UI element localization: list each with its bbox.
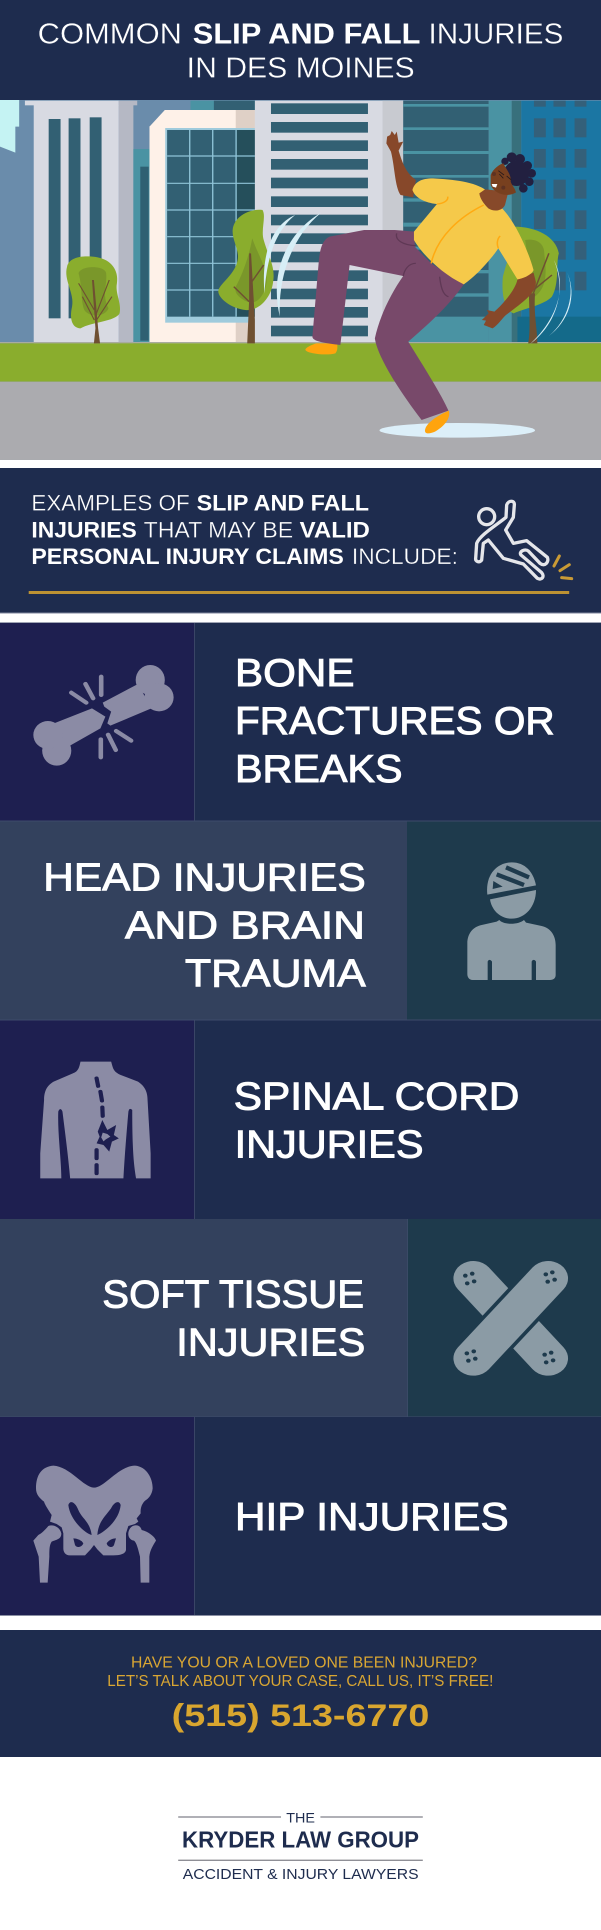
label: [43, 857, 366, 996]
intro text: THAT MAY BE: [144, 518, 293, 543]
label: SOFT TISSUE: [102, 1273, 364, 1316]
tree: right: [502, 227, 559, 343]
illustration: city street with man slipping: [0, 100, 601, 460]
label: BREAKS: [235, 748, 402, 791]
title: INJURIES: [428, 18, 563, 50]
icon: back with spine injury: [40, 1062, 151, 1178]
panel: soft tissue injuries: [0, 1219, 601, 1417]
logo: The Kryder Law Group: [178, 1810, 423, 1883]
label: HIP INJURIES: [235, 1496, 509, 1539]
logo: The Kryder Law Group: KRYDER LAW GROUP: [182, 1826, 419, 1852]
title: [38, 18, 563, 85]
intro text: INCLUDE:: [352, 544, 458, 569]
title: IN DES MOINES: [187, 53, 415, 85]
panel: bone fractures or breaks: [0, 623, 601, 821]
motion lines: [264, 213, 572, 344]
logo: The Kryder Law Group: ACCIDENT & INJURY LAWYERS: [183, 1867, 419, 1883]
intro text: [31, 491, 458, 569]
icon: pelvis: [33, 1466, 156, 1583]
label: TRAUMA: [185, 953, 366, 996]
label: BONE: [235, 652, 354, 695]
label: INJURIES: [235, 1123, 424, 1166]
road: [0, 382, 601, 460]
panel: hip injuries: [0, 1417, 601, 1616]
icon: bandaged head: [467, 862, 556, 980]
label: AND BRAIN: [125, 905, 365, 948]
icon: broken bone: [33, 665, 174, 766]
intro text: VALID: [300, 518, 370, 543]
call to action text: [107, 1654, 493, 1690]
call to action text: HAVE YOU OR A LOVED ONE BEEN INJURED?: [131, 1654, 477, 1671]
label: SPINAL CORD: [234, 1075, 519, 1118]
building: teal and blue right: [403, 101, 601, 343]
label: INJURIES: [176, 1321, 365, 1364]
icon: person slipping: [476, 501, 572, 579]
man falling: body: [305, 131, 536, 433]
intro text: SLIP AND FALL: [197, 491, 369, 516]
logo: The Kryder Law Group: THE: [286, 1810, 315, 1826]
grass: [0, 343, 601, 382]
panel: spinal cord injuries: [0, 1020, 601, 1219]
panel: intro statement: [0, 468, 601, 613]
intro text: INJURIES: [31, 518, 137, 543]
label: [102, 1273, 365, 1364]
tree: centre: [218, 210, 274, 343]
panel: header: [0, 0, 601, 100]
intro text: EXAMPLES OF: [31, 491, 190, 516]
building: tall grey left: [25, 101, 137, 343]
man falling: head and neck: [479, 152, 536, 211]
title: SLIP AND FALL: [193, 18, 420, 50]
label: HEAD INJURIES: [43, 857, 366, 900]
puddle: [379, 423, 535, 438]
title: COMMON: [38, 18, 182, 50]
phone number: (515) 513-6770: [172, 1697, 429, 1733]
panel: call to action: [0, 1630, 601, 1757]
call to action text: LET’S TALK ABOUT YOUR CASE, CALL US, IT’S FREE!: [107, 1673, 493, 1690]
building: striped white: [255, 101, 403, 343]
label: FRACTURES OR: [235, 700, 555, 743]
label: [235, 652, 555, 791]
icon: crossed bandages: [463, 1270, 557, 1364]
intro text: PERSONAL INJURY CLAIMS: [31, 544, 344, 569]
label: [234, 1075, 519, 1166]
panel: head injuries and brain trauma: [0, 821, 601, 1020]
tree: left: [66, 256, 120, 343]
building: cream with window grid: [149, 110, 255, 343]
